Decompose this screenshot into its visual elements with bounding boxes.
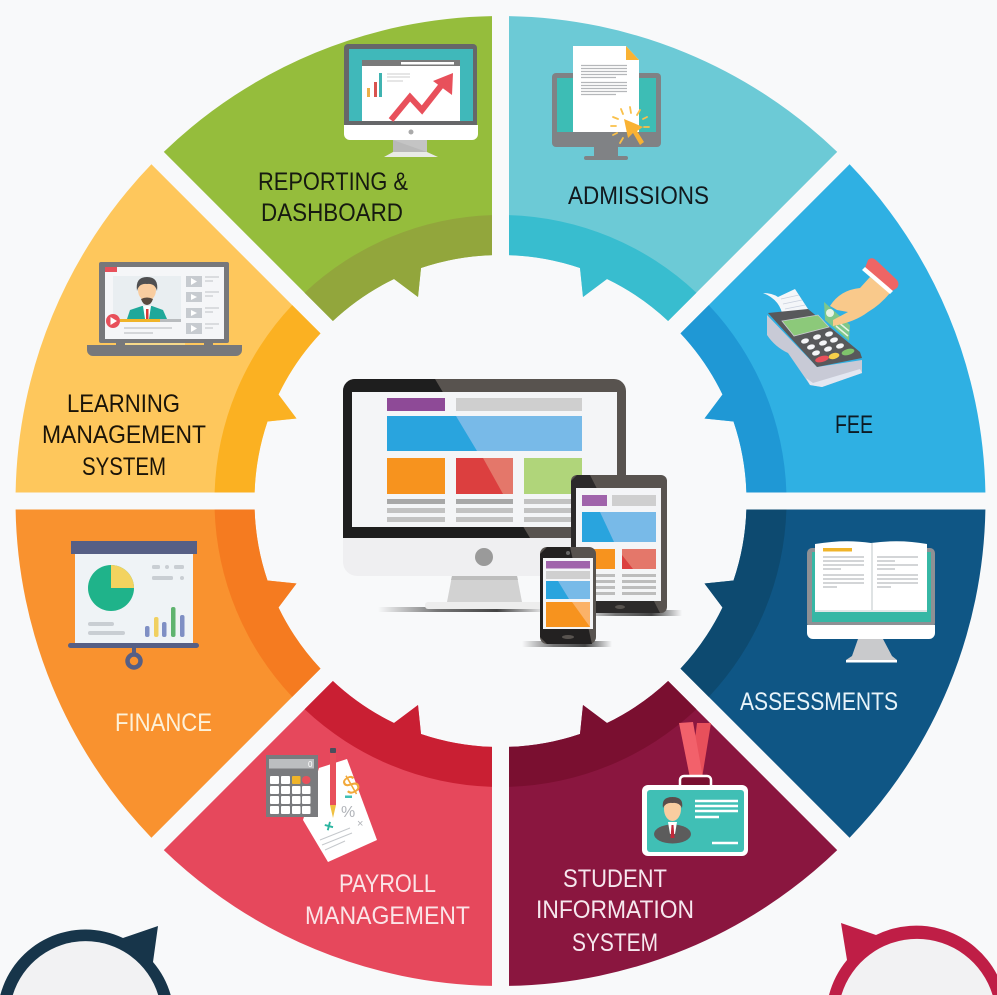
label: reporting and dashboard	[258, 168, 408, 227]
sector: payroll management	[164, 681, 492, 986]
icon: open book on monitor	[807, 541, 935, 662]
icon: monitor, document and cursor	[552, 46, 661, 160]
label: payroll management: MANAGEMENT	[305, 902, 470, 930]
label: learning management system: LEARNING	[67, 390, 180, 418]
icon: calculator, pencil and note	[266, 748, 377, 862]
panel: student information system	[509, 681, 837, 986]
label: learning management system: MANAGEMENT	[42, 421, 206, 449]
panel: finance	[16, 510, 320, 838]
sector: student information system	[509, 681, 837, 986]
sector: learning management system	[16, 164, 320, 492]
panel: admissions	[509, 16, 837, 321]
label: student information system: INFORMATION	[536, 896, 694, 924]
inner band: payroll management	[305, 681, 492, 787]
label: student information system: STUDENT	[563, 865, 667, 893]
panel: payroll management	[164, 681, 492, 986]
inner band: fee	[680, 305, 786, 492]
callout: bottom-right crimson circle	[829, 923, 997, 995]
icon: monitor with rising chart	[344, 44, 478, 157]
label: admissions: ADMISSIONS	[568, 182, 709, 210]
icon: tablet	[571, 475, 682, 616]
label: student information system: SYSTEM	[572, 929, 658, 957]
sector: admissions	[509, 16, 837, 321]
label: student information system	[536, 865, 694, 957]
icon: calculator, pencil and note: ×	[357, 818, 363, 830]
label: reporting and dashboard: REPORTING &	[258, 168, 408, 196]
inner band: finance	[215, 510, 320, 697]
icon: smartphone	[522, 547, 612, 647]
label: learning management system	[42, 390, 206, 481]
icon: laptop with video lesson	[87, 262, 242, 356]
panel: fee	[680, 164, 985, 492]
panel: learning management system	[16, 164, 320, 492]
icon: ID badge on lanyard	[642, 722, 748, 856]
icon: calculator, pencil and note: $	[337, 768, 365, 801]
label: reporting and dashboard: DASHBOARD	[261, 199, 403, 227]
center illustration: responsive devices	[343, 379, 682, 647]
icon: presentation board with charts	[68, 541, 199, 668]
label: finance: FINANCE	[115, 709, 212, 737]
sector: assessments	[680, 510, 985, 838]
icon: calculator, pencil and note: 0	[308, 760, 313, 769]
panel: assessments	[680, 510, 985, 838]
label: assessments: ASSESSMENTS	[740, 688, 898, 716]
inner band: student information system	[509, 681, 696, 787]
icon: calculator, pencil and note: %	[341, 804, 355, 821]
inner band: assessments	[680, 510, 786, 697]
callout: bottom-left navy circle	[0, 926, 171, 995]
label: learning management system: SYSTEM	[82, 453, 166, 481]
inner band: reporting	[305, 215, 492, 321]
panel: reporting and dashboard	[164, 16, 492, 321]
inner band: admissions	[509, 215, 696, 321]
sector: fee	[680, 164, 985, 492]
sector: reporting	[164, 16, 492, 321]
label: payroll management: PAYROLL	[339, 870, 436, 898]
label: fee: FEE	[835, 411, 873, 439]
sector: finance	[16, 510, 320, 838]
label: payroll management	[305, 870, 470, 930]
icon: desktop monitor	[343, 379, 626, 612]
icon: card payment terminal and hand	[763, 258, 898, 387]
icon: calculator, pencil and note: +	[322, 816, 336, 837]
inner band: learning management system	[215, 305, 320, 492]
